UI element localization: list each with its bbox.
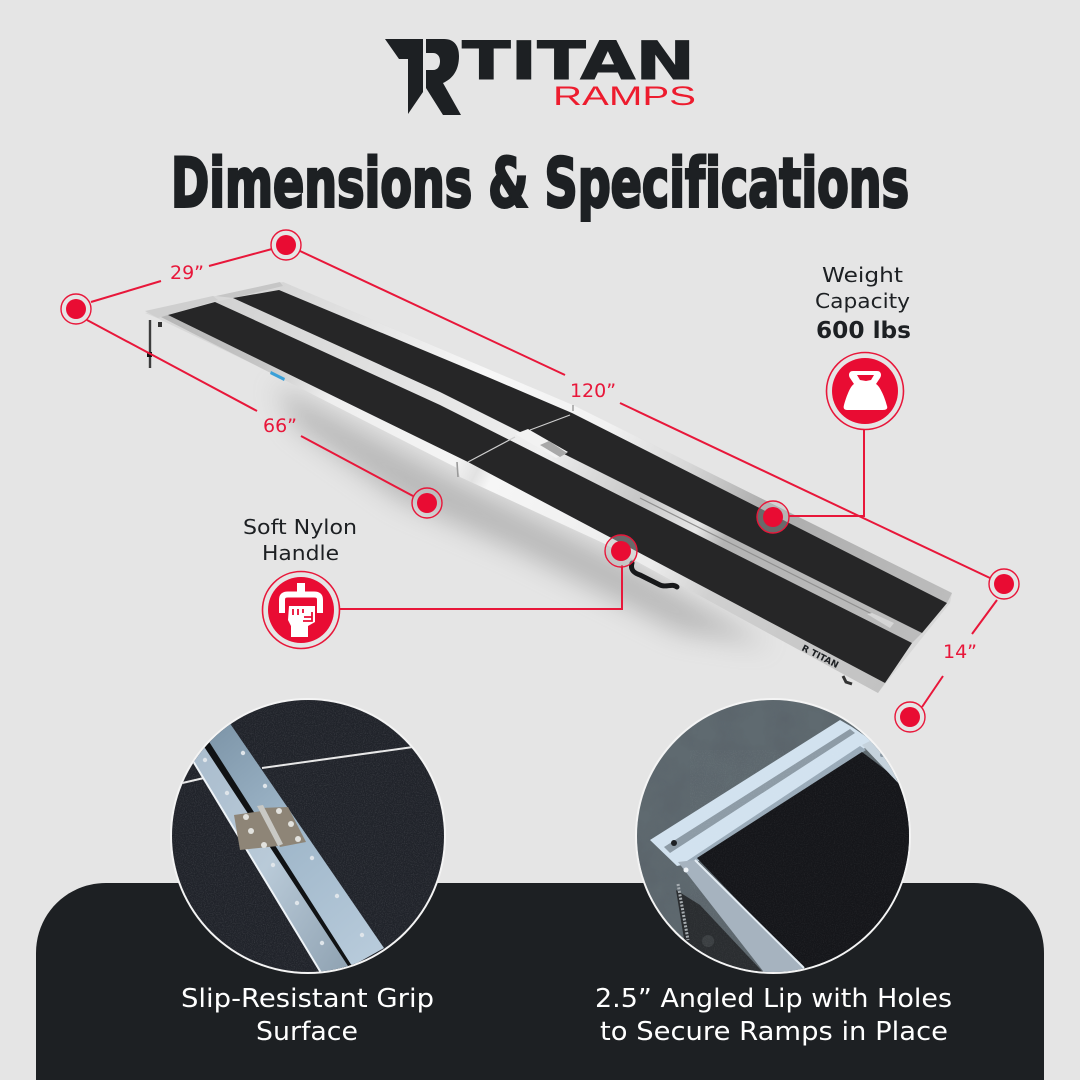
callout: soft nylon handle — [243, 515, 357, 648]
weight text: Weight — [822, 263, 903, 287]
concrete ground — [637, 700, 909, 972]
upper side rail — [279, 282, 952, 603]
blue label — [270, 371, 285, 381]
marker 3 — [412, 488, 442, 518]
handle text — [243, 515, 357, 565]
caption: grip surface: Slip-Resistant Grip — [181, 984, 434, 1014]
handle leader — [340, 565, 622, 609]
weight leader — [789, 430, 864, 516]
grip mat — [172, 700, 444, 972]
logo mark — [385, 39, 461, 115]
chain — [678, 884, 688, 940]
caption: grip surface — [181, 984, 434, 1047]
logo wordmark: TITAN — [462, 31, 695, 92]
ramp photo — [145, 282, 952, 693]
weight text — [815, 263, 911, 344]
lip label: 14” — [943, 641, 977, 663]
ramp body — [145, 282, 952, 693]
caption: angled lip: 2.5” Angled Lip with Holes — [595, 984, 952, 1014]
fold seam — [182, 778, 203, 784]
side rail left — [678, 860, 804, 980]
near lip — [145, 296, 218, 318]
dimension lines — [87, 249, 997, 707]
fold seam — [468, 437, 515, 462]
marker 1 — [61, 294, 91, 324]
logo subtitle: RAMPS — [553, 81, 696, 111]
dark gap — [203, 738, 356, 972]
icon: kettlebell — [826, 352, 904, 430]
detail photo: grip surface — [170, 698, 446, 974]
caption: angled lip: to Secure Ramps in Place — [600, 1017, 948, 1047]
brand mark on ramp: R TITAN — [800, 644, 840, 671]
dimension labels — [170, 262, 977, 663]
ramp shadow — [275, 385, 770, 645]
dimension markers — [61, 230, 1019, 732]
weight text: Capacity — [815, 289, 910, 313]
left rail — [193, 745, 348, 976]
hinge — [234, 805, 306, 850]
marker 5 — [989, 569, 1019, 599]
width label: 29” — [170, 262, 204, 284]
handle text: Soft Nylon — [243, 515, 357, 539]
angled lip — [650, 720, 874, 866]
bottom dark panel — [36, 883, 1044, 1080]
caption: grip surface: Surface — [256, 1017, 358, 1047]
icon: fist gripping handle — [262, 572, 340, 648]
weight text: 600 lbs — [816, 318, 911, 344]
right grip mat — [233, 290, 947, 633]
handle text: Handle — [262, 541, 339, 565]
hardware shadow — [676, 890, 762, 972]
logo: Titan Ramps — [385, 31, 696, 115]
marker 4 — [757, 501, 789, 533]
chain clip — [843, 676, 852, 684]
chain — [147, 320, 162, 368]
marker 6 — [895, 702, 925, 732]
rivets — [203, 751, 364, 945]
section length label: 66” — [263, 415, 297, 437]
left grip mat — [168, 302, 912, 683]
lower side rail — [157, 315, 885, 693]
detail photo: angled lip — [635, 698, 911, 974]
right rail — [208, 722, 384, 966]
center rail — [215, 298, 922, 643]
length label: 120” — [570, 380, 616, 402]
caption: angled lip — [595, 984, 952, 1047]
side rail right — [862, 741, 898, 784]
callout: weight capacity — [815, 263, 911, 430]
marker 7 — [605, 535, 637, 567]
grip mat — [697, 752, 909, 968]
nylon handle — [631, 563, 677, 587]
marker 2 — [271, 230, 301, 260]
center hinge — [457, 405, 894, 628]
